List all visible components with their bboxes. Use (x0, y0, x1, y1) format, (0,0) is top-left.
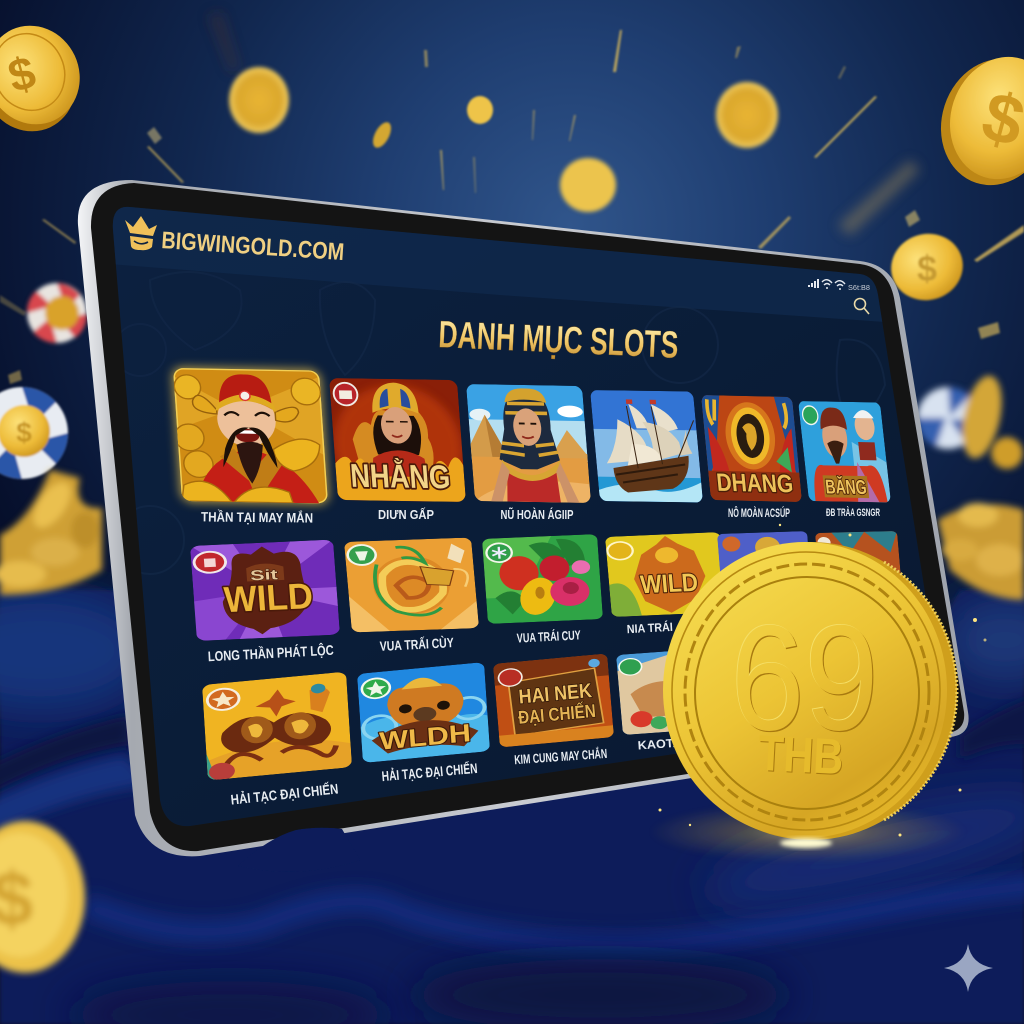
coin: value 69: 69 (732, 595, 880, 763)
card: Nhằng: NHẰNG (349, 458, 452, 496)
coin: inner ring (695, 577, 919, 809)
status bar: S6t:B8 (848, 283, 870, 292)
logo: crown icon (125, 216, 157, 250)
coin: currency: THB (758, 726, 846, 786)
fabric fold over tablet (238, 828, 360, 872)
label: LONG THẦN PHÁT LỘC (207, 641, 334, 664)
coin: value 69: 69 (730, 593, 878, 761)
coin: top middle (716, 82, 778, 148)
coin: top left: $ (3, 46, 41, 102)
coin: bottom highlight (780, 838, 832, 848)
fabric: base cloth (0, 590, 1024, 1024)
card: Light painted (616, 651, 669, 734)
coin: right (884, 226, 970, 308)
label: KIM CUNG MAY CHẮN (514, 746, 608, 767)
coin pile: right (938, 503, 1024, 600)
casino chip: blue left (0, 387, 68, 479)
casino chip: blue right (917, 372, 1008, 462)
fabric: bright fold left (0, 755, 150, 840)
card: Long Thần (Wild purple): Sit (250, 566, 278, 584)
tablet: black bezel (91, 183, 964, 851)
card: purple hidden (718, 531, 808, 572)
fabric: lit right (697, 772, 1024, 928)
label: KAOTA (637, 735, 682, 753)
smoke streaks (208, 12, 920, 236)
coin: outer ring (672, 552, 940, 830)
search icon (854, 298, 869, 314)
card: Hải chiến orange: HAI NEK (518, 679, 593, 709)
coin: face (663, 542, 947, 838)
card: Ship (590, 390, 703, 502)
card: Băng (798, 401, 891, 502)
screen: header band (100, 200, 890, 322)
fabric: lit upper right (945, 598, 1024, 682)
label: DIƯN GẤP (378, 507, 434, 522)
tablet: metal body (78, 180, 969, 856)
card: Hải tặc yellow (202, 672, 352, 781)
card: Băng: BĂNG (824, 475, 868, 498)
card: Fruits green (482, 534, 603, 624)
card: Hải chiến orange: ĐẠI CHIẾN (517, 700, 597, 728)
card: Thần Tài (158, 366, 343, 505)
coin: edge thickness (665, 542, 957, 840)
label: HẢI TẠC ĐẠI CHIẾN (230, 780, 339, 808)
label: VUA TRẤI CÙY (379, 635, 454, 654)
card: Wildh blue: WLDH (378, 718, 472, 755)
title: DANH MỤC SLOTS (438, 314, 679, 367)
label: VUA TRÁI CUY (516, 627, 581, 646)
card: orange hidden (816, 531, 900, 574)
card: Dhang (701, 395, 802, 502)
sparkles (658, 524, 986, 836)
coin: center (560, 158, 616, 212)
sparkle watermark star (944, 944, 993, 992)
label: NŨ HOÀN ÁGIIP (500, 507, 574, 522)
coin pile: left (0, 470, 102, 595)
big coin 69 THB (663, 542, 957, 840)
card: Dhang: DHANG (715, 469, 794, 499)
label: HẢI TẠC ĐẠI CHIẾN (381, 760, 478, 784)
coin: small blurred (467, 96, 493, 124)
fabric: bright sweep (85, 885, 1024, 945)
fabric: dark fold left (0, 715, 130, 800)
coin: dashed ring (685, 564, 929, 820)
fabric: lit upper left (0, 590, 150, 710)
tablet (78, 180, 969, 856)
coin: reeded edge (884, 562, 957, 820)
fabric (0, 590, 1024, 1024)
logo: wordmark: BIGWINGOLD.COM (161, 227, 345, 266)
logo (125, 216, 345, 266)
coin: top right (925, 43, 1024, 200)
fabric: dark fold right (960, 695, 1024, 760)
card: Wild yellow (605, 532, 727, 617)
coin: currency: THB (757, 725, 845, 785)
coin: bottom left (0, 821, 85, 973)
label: NIA TRÁI (626, 619, 673, 636)
card: Wildh blue (357, 662, 490, 763)
card: Hải chiến orange (493, 654, 614, 748)
tablet: screen (100, 200, 942, 826)
casino chip: blue left: $ (16, 417, 32, 448)
card: Nữ hoàng Ai Cập (459, 384, 593, 503)
coin: small chip (369, 119, 395, 151)
coin: blurred right small (991, 437, 1023, 469)
status bar (808, 279, 870, 292)
coin: value 69: 69 (730, 594, 878, 762)
card: Nhằng (329, 378, 466, 508)
label: NÔ MOÀN ACSÚP (728, 507, 790, 520)
coin: right: $ (917, 248, 937, 289)
coin: top center blurred (229, 67, 289, 133)
label: ĐB TRÀA GSNGR (826, 506, 880, 519)
card: Long Thần (Wild purple) (190, 540, 340, 640)
card: Dragon orange (344, 538, 479, 632)
fabric: dark lower left (70, 981, 390, 1024)
card: Wild yellow: WILD (639, 567, 699, 599)
card: Long Thần (Wild purple): WILD (223, 575, 314, 620)
casino chips: left (27, 283, 87, 343)
screen: faint watermark pattern (124, 307, 886, 574)
light streaks (0, 30, 1024, 384)
coin: top left (0, 10, 96, 147)
fabric: dark lower center (410, 959, 790, 1024)
big coin glow (648, 802, 968, 862)
label: THẦN TẠI MAY MẮN (201, 509, 313, 526)
